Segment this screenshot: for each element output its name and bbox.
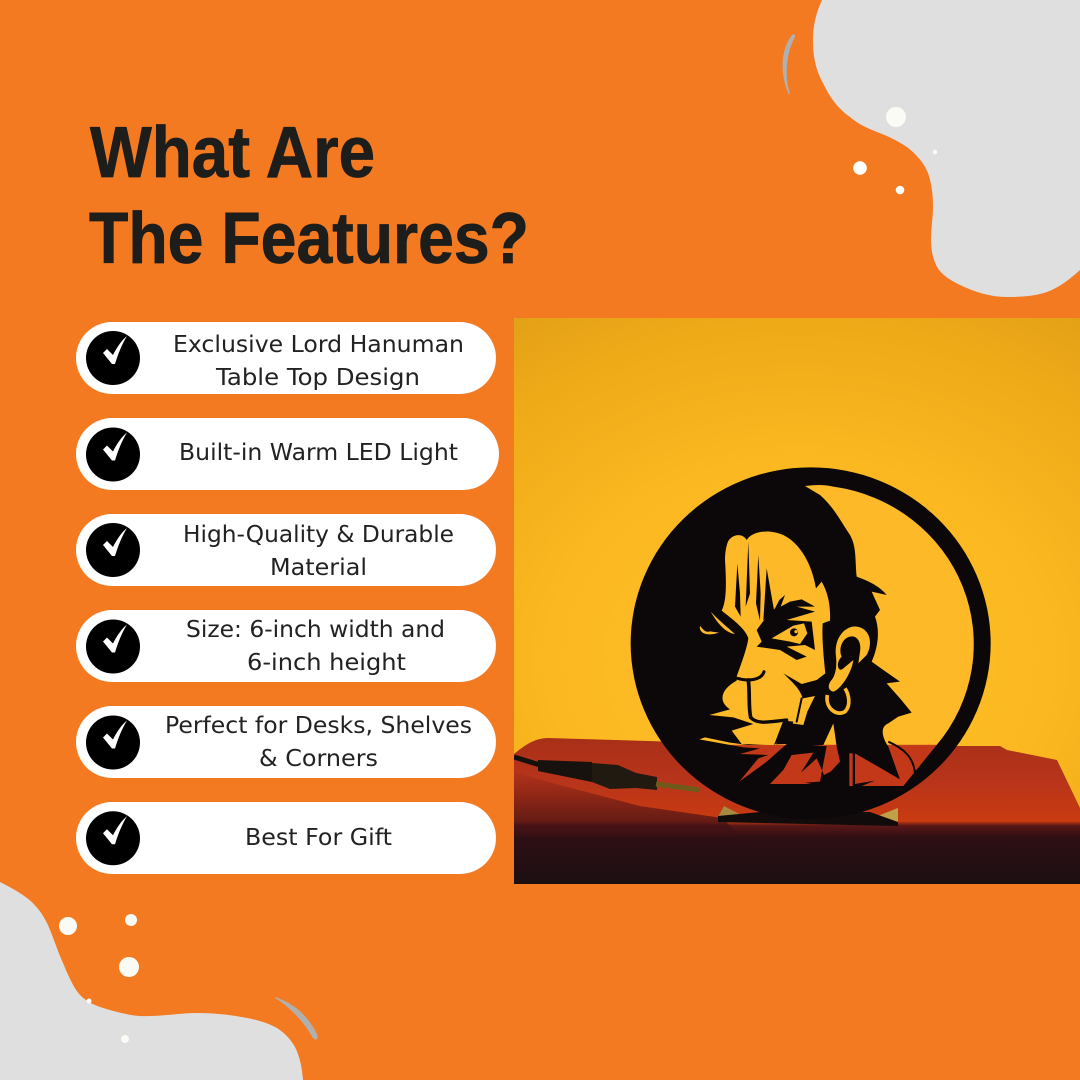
title: The Features? [89,199,529,279]
face [709,531,830,745]
title [89,113,529,279]
feature: material [76,514,496,586]
feature: placement: & Corners [259,746,378,772]
photo wall [514,318,1080,808]
product photo [514,318,1080,884]
forehead tilak lines and eye mass [735,542,815,660]
feature: exclusive design [76,322,496,394]
nose and mouth lines [737,672,802,722]
feature: LED light: Built-in Warm LED Light [179,440,458,466]
feature: gift: Best For Gift [245,825,392,851]
ear [829,627,870,692]
photo table cloth [514,738,1080,884]
feature list [76,322,499,874]
decorative blob: bottom left [0,882,318,1080]
earring [827,688,849,713]
feature: material: Material [270,555,367,581]
feature: placement [76,706,496,778]
feature: placement: Perfect for Desks, Shelves [165,713,472,739]
lamp stand [718,806,898,826]
decorative blob: top right [783,0,1080,297]
title: What Are [90,113,375,193]
left brow cuts [700,612,735,634]
feature: LED light [76,418,499,490]
feature: size: 6-inch height [247,650,406,676]
feature: exclusive design: Exclusive Lord Hanuman [173,332,464,358]
red cut-outs beneath the beard [699,723,853,786]
feature: exclusive design: Table Top Design [215,365,420,391]
hair strand [888,742,915,773]
eye [772,623,807,644]
feature: gift [76,802,496,874]
fang [774,721,793,745]
lamp: Hanuman silhouette in ring [631,467,991,819]
feature: material: High-Quality & Durable [183,522,454,548]
ring opening [805,485,974,786]
power cable [514,757,700,790]
feature: size: Size: 6-inch width and [186,617,445,643]
feature: size [76,610,496,682]
